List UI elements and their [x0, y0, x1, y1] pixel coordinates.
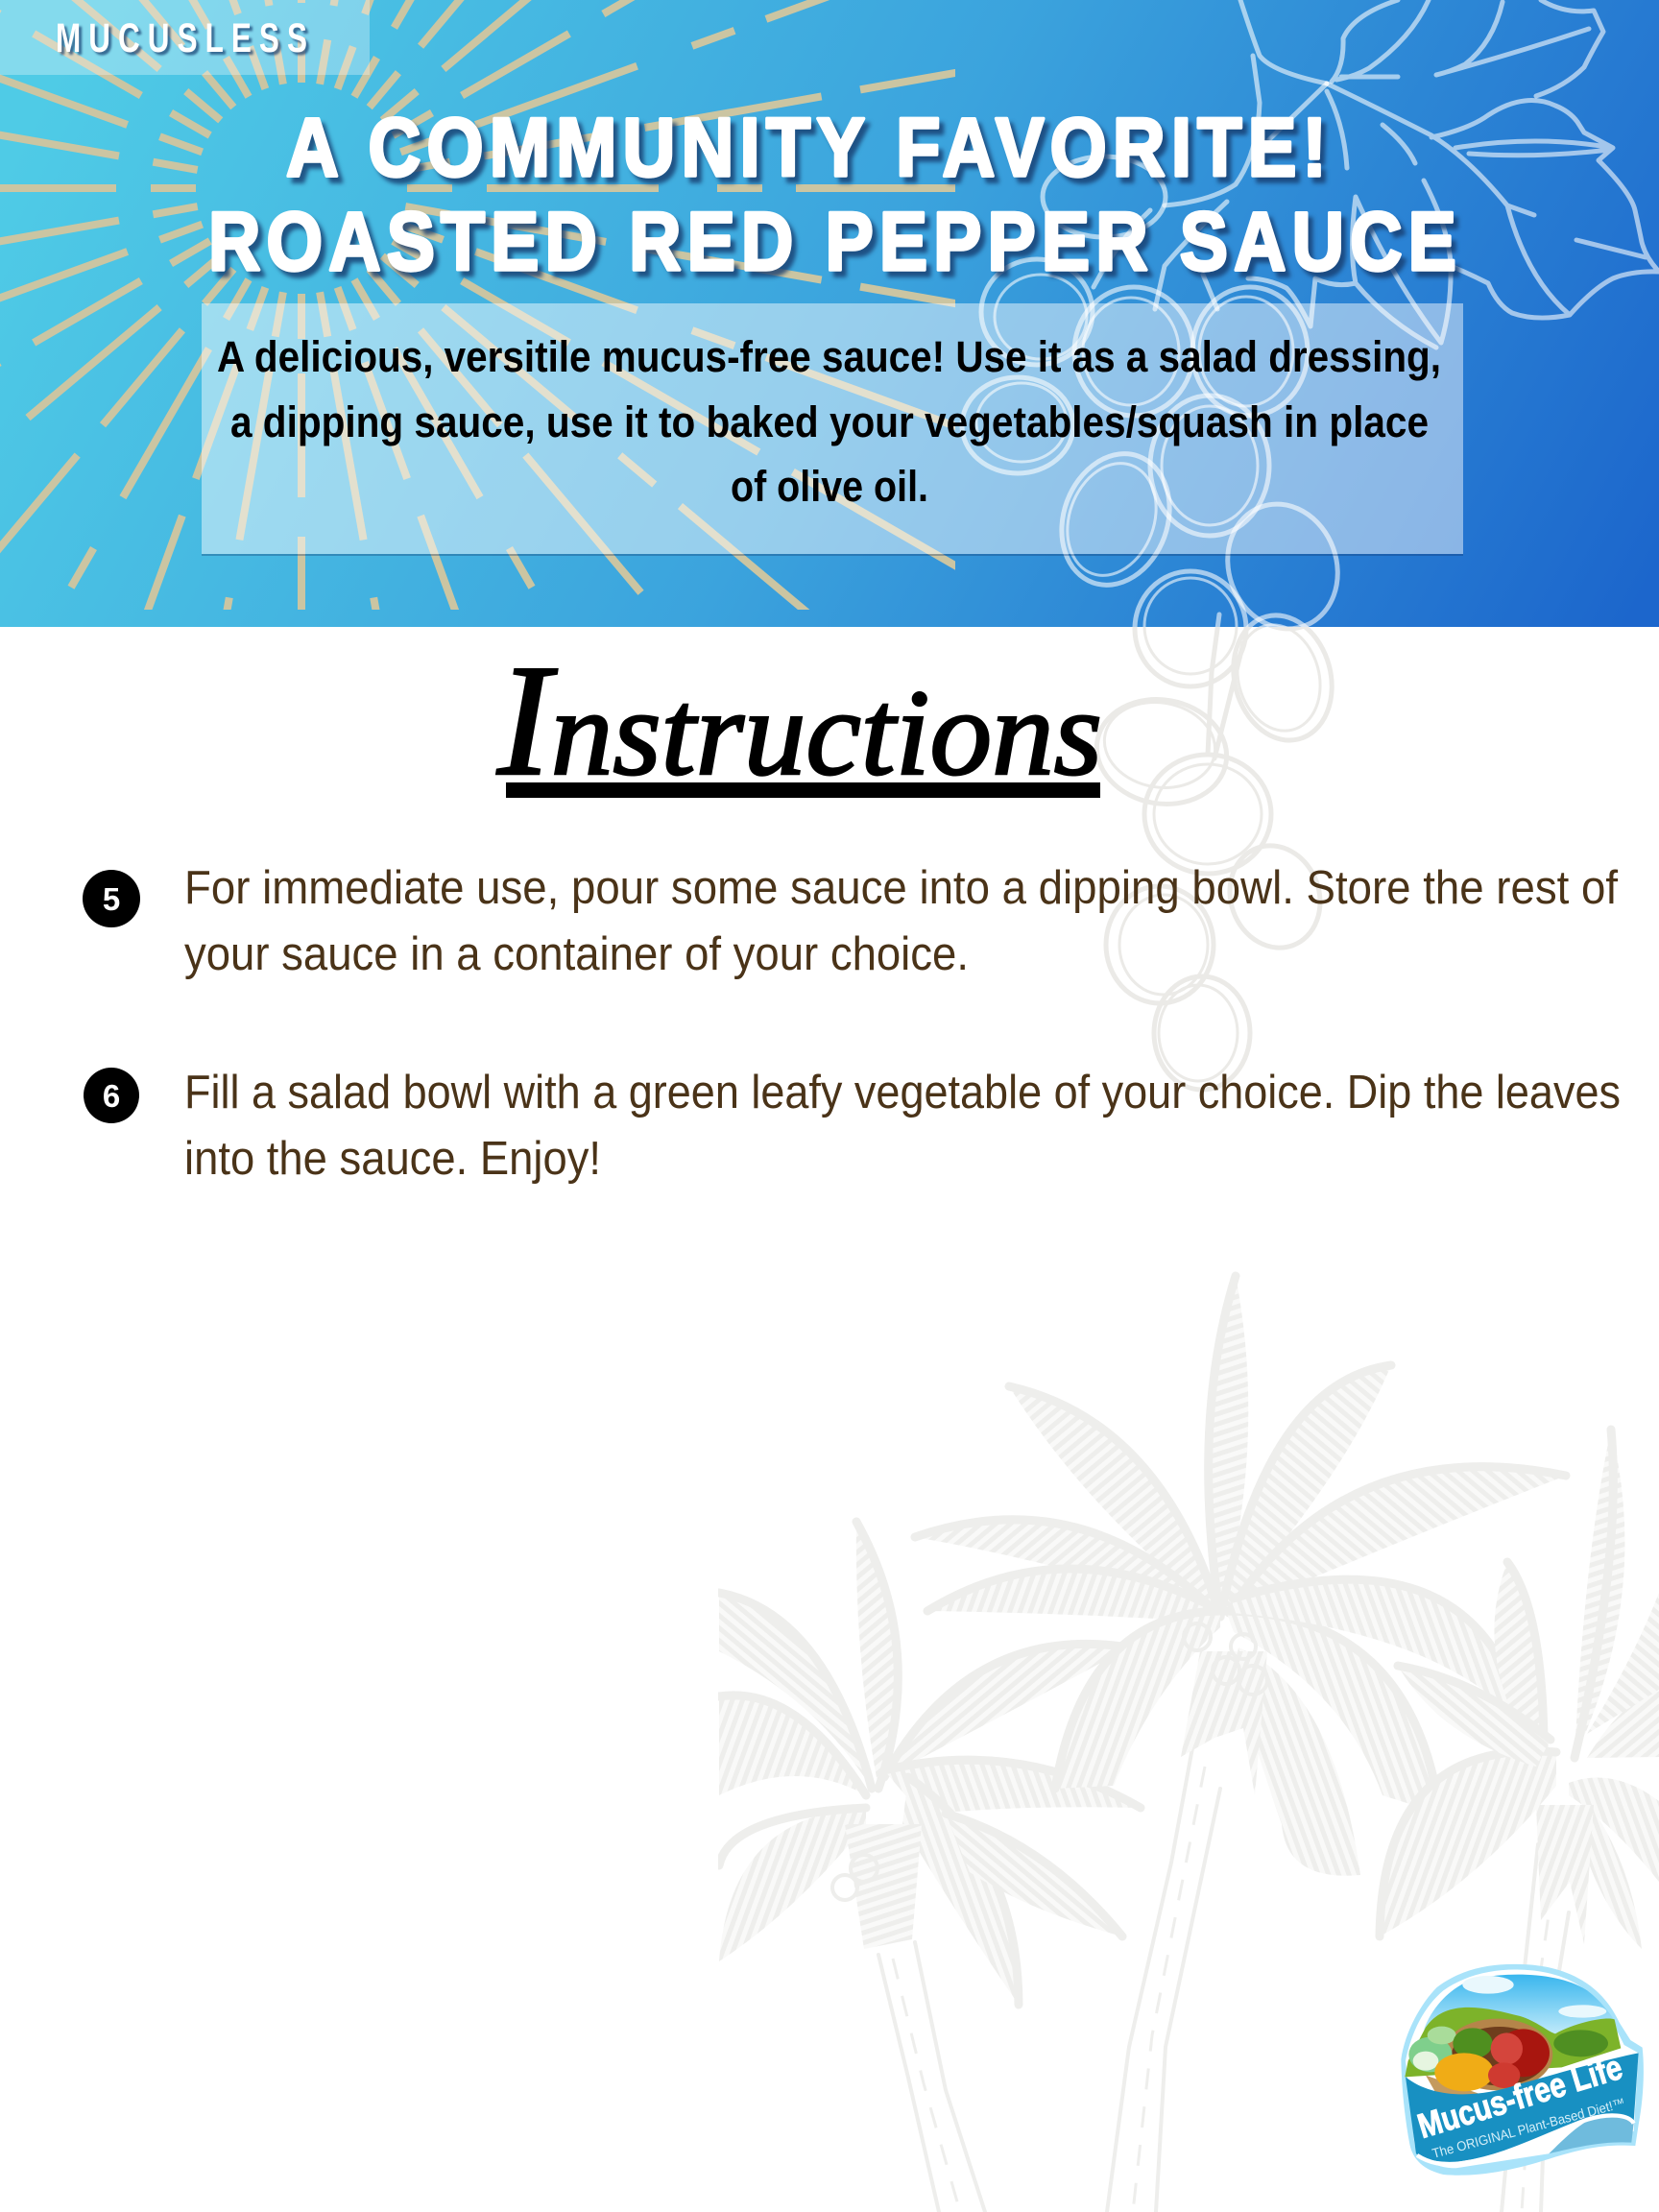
text: description — [217, 332, 1441, 511]
text: brand name: MUCUSLESS — [56, 15, 315, 61]
text: description: A delicious, versitile mucus-free sauce! Use it as a salad dressing, — [217, 332, 1441, 381]
text: description: a dipping sauce, use it to baked your vegetables/squash in place — [230, 397, 1429, 446]
step 6 — [84, 1067, 1621, 1185]
icon: centre palm tree — [915, 1276, 1566, 2212]
heading: Instructions: Instructions — [496, 632, 1102, 808]
title — [208, 102, 1462, 288]
title: ROASTED RED PEPPER SAUCE — [208, 196, 1462, 288]
panel: blue gradient header — [0, 0, 1659, 627]
text: step 5: your sauce in a container of your choice. — [184, 928, 969, 980]
panel: description box — [202, 303, 1463, 556]
icon: number badge 6 — [84, 1068, 139, 1123]
icon: number badge 5 — [83, 870, 140, 927]
icon: number badge 6: 6 — [103, 1078, 120, 1114]
palm trees watermark — [719, 1276, 1659, 2212]
title: A COMMUNITY FAVORITE! — [286, 102, 1333, 194]
icon: vine illustration on white page — [1094, 627, 1334, 1093]
text: step 5 — [184, 862, 1618, 980]
icon: left palm tree — [719, 1522, 1141, 2212]
icon: vine illustration over header — [960, 0, 1659, 627]
text: description: of olive oil. — [731, 462, 928, 511]
step 5 — [83, 862, 1618, 980]
logo: Mucus-free Life — [1401, 1964, 1644, 2176]
text: step 6: into the sauce. Enjoy! — [184, 1133, 601, 1185]
icon: number badge 5: 5 — [103, 881, 120, 917]
sunburst rays — [0, 0, 1098, 1121]
badge: brand tag box — [0, 0, 370, 75]
logo: Mucus-free Life: The ORIGINAL Plant-Based Diet!™ — [1431, 2095, 1626, 2161]
icon: right palm tree — [1380, 1430, 1659, 2212]
text: step 6 — [184, 1067, 1621, 1185]
